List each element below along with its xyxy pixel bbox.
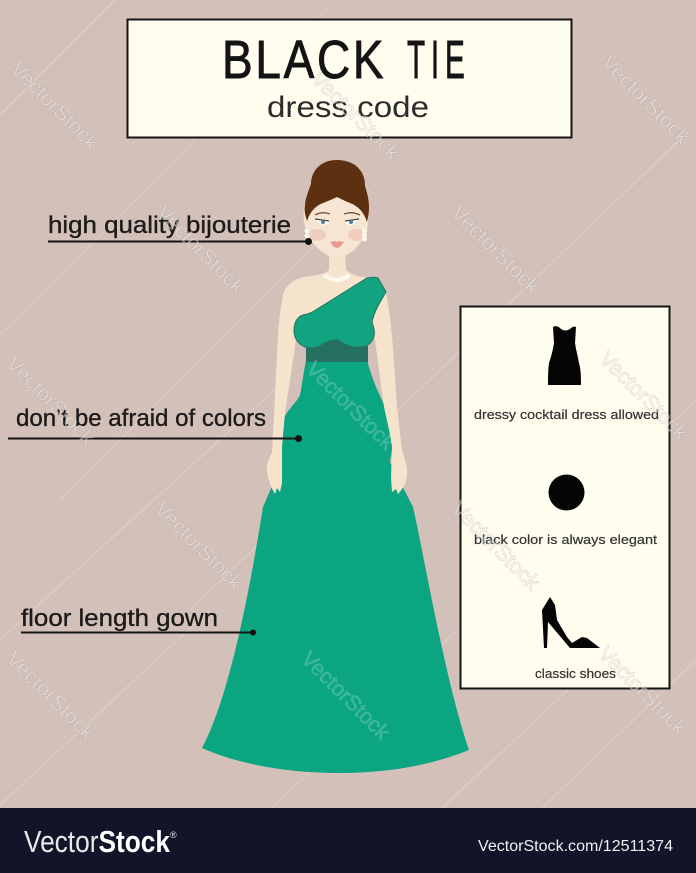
heading: Black Tie	[222, 30, 465, 90]
eyes and brows	[315, 213, 360, 225]
waist band	[306, 340, 368, 362]
text: VectorStock	[1, 647, 100, 745]
callout: colors	[8, 405, 302, 442]
callout: colors: don’t be afraid of colors	[16, 405, 266, 432]
bodice	[294, 277, 386, 348]
text: VectorStock	[446, 497, 545, 595]
callout: floor length gown	[21, 605, 256, 636]
skirt	[202, 360, 469, 773]
figure: woman in green gown	[202, 160, 469, 773]
callout: high quality bijouterie	[48, 212, 312, 245]
face	[304, 190, 368, 258]
heading: Black Tie: BLACK	[222, 30, 384, 90]
pearl necklace	[326, 276, 348, 280]
heading: Black Tie: TIE	[407, 31, 465, 90]
footer url: VectorStock.com/12511374	[478, 838, 673, 855]
right arm	[372, 292, 407, 494]
text: VectorStock	[1, 352, 100, 450]
text: VectorStock	[594, 347, 693, 445]
text: VectorStock	[151, 201, 250, 299]
text: VectorStock	[149, 497, 248, 595]
footer logo: VectorStock	[24, 824, 171, 859]
text: VectorStock	[306, 67, 405, 165]
callout: high quality bijouterie: high quality bijouterie	[48, 212, 291, 239]
panel: alternatives	[460, 306, 670, 688]
title panel	[128, 20, 572, 138]
hair	[305, 160, 369, 222]
cheeks	[308, 229, 366, 241]
icon: cocktail dress	[548, 326, 581, 385]
icon: black circle	[548, 474, 584, 510]
text: VectorStock	[301, 357, 400, 455]
subheading: dress code: dress code	[267, 91, 429, 124]
text: VectorStock	[446, 201, 545, 299]
text: VectorStock	[296, 647, 395, 745]
lips	[330, 241, 344, 248]
label: cocktail dress: dressy cocktail dress allowed	[474, 407, 659, 422]
icon: high heel shoe	[542, 597, 600, 648]
earrings	[304, 228, 367, 242]
label: classic shoes: classic shoes	[535, 666, 617, 681]
chest and neck	[300, 250, 386, 322]
left arm	[267, 277, 312, 494]
callout: floor length gown: floor length gown	[21, 605, 218, 632]
text: VectorStock	[593, 642, 692, 740]
footer bar	[0, 808, 696, 873]
registered mark: ®	[170, 830, 177, 840]
text: VectorStock	[5, 57, 104, 155]
label: black color: black color is always elegant	[474, 532, 657, 547]
text: VectorStock	[596, 51, 695, 149]
